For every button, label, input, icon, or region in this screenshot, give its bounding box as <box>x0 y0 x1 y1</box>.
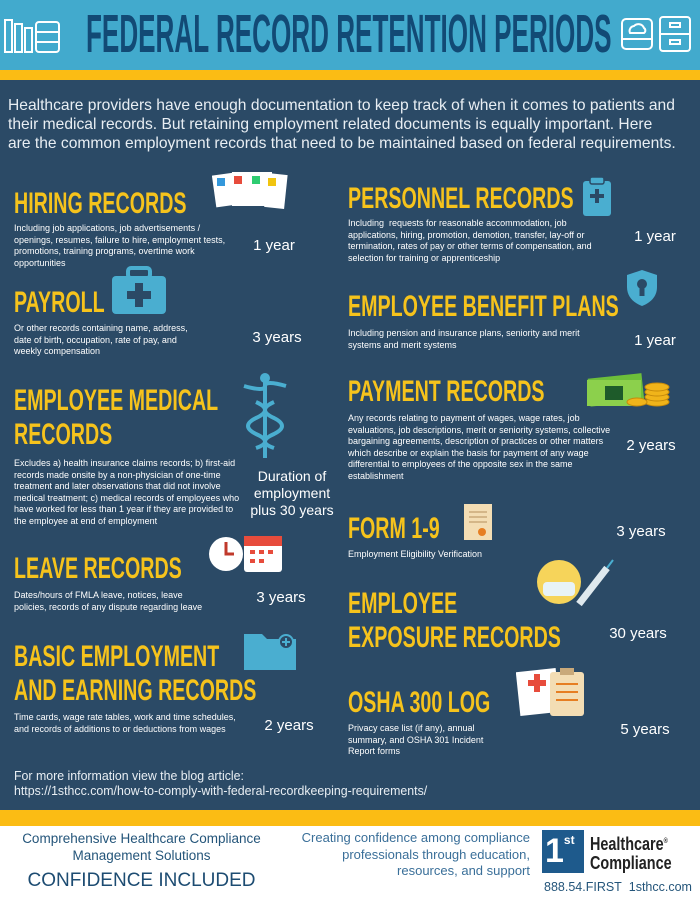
section: payment records: Any records relating to payment of wages, wage rates, job evaluations, job descriptions, merit or seniority systems, collective bargaining agreements, description of practices or other matters which describe or explain the basis for payment of any wage differential to employees of the opposite sex in the same establishment <box>348 413 610 480</box>
section: hiring records: Including job applications, job advertisements / openings, resumes, failure to hire, employment tests, promotions, training programs, overtime work opportunities <box>14 223 225 268</box>
section: osha 300 log: OSHA 300 LOG <box>348 686 490 719</box>
section: employee medical records: RECORDS <box>14 418 112 451</box>
icon: clipboard <box>583 178 611 216</box>
section: payment records: PAYMENT RECORDS <box>348 375 545 408</box>
icon: mask and syringe <box>537 560 614 606</box>
section: hiring records: 1 year <box>253 237 295 254</box>
section: payroll: Or other records containing name, address, date of birth, occupation, rate of pay, and weekly compensation <box>14 323 188 356</box>
footer left <box>22 831 261 891</box>
section: osha 300 log: 5 years <box>620 721 670 738</box>
section: leave records: 3 years <box>256 589 306 606</box>
section: leave records: Dates/hours of FMLA leave, notices, leave policies, records of any dispute regarding leave <box>14 590 202 612</box>
section: basic employment and earning records: BASIC EMPLOYMENT <box>14 640 219 673</box>
section: payment records: 2 years <box>626 437 676 454</box>
blog link: https://1sthcc.com/how-to-comply-with-federal-recordkeeping-requirements/ <box>14 783 427 798</box>
section: employee exposure records: EXPOSURE RECORDS <box>348 621 561 654</box>
section: employee benefit plans: Including pension and insurance plans, seniority and merit systems and merit systems <box>348 328 580 350</box>
section: hiring records <box>14 187 295 268</box>
section: personnel records <box>348 182 676 263</box>
bottom yellow stripe <box>0 810 700 826</box>
section: employee medical records: EMPLOYEE MEDICAL <box>14 384 218 417</box>
intro text: Healthcare providers have enough documentation to keep track of when it comes to patients and <box>8 97 675 114</box>
section: osha 300 log <box>348 686 670 756</box>
section: employee exposure records <box>348 587 667 654</box>
icon: money and coins <box>587 373 670 407</box>
intro text <box>8 97 676 152</box>
section: payment records <box>348 375 676 480</box>
logo: 888.54.FIRST 1sthcc.com <box>544 880 692 894</box>
section: payroll: 3 years <box>252 329 302 346</box>
icon: medical report <box>516 668 584 716</box>
icon: shield <box>627 270 657 306</box>
intro text: their medical records. But retaining employment related documents is equally important. Here <box>8 116 652 133</box>
section: employee exposure records: 30 years <box>609 625 667 642</box>
section: basic employment and earning records: Time cards, wage rate tables, work and time schedules, and records of additions to or deductions from wages <box>14 712 236 734</box>
section: employee benefit plans <box>348 290 676 350</box>
logo: Healthcare® <box>590 834 668 854</box>
section: form i-9 <box>348 512 666 559</box>
section: basic employment and earning records <box>14 640 314 734</box>
icon: folder <box>244 634 296 670</box>
blog link: For more information view the blog article: <box>14 768 244 783</box>
section: payroll <box>14 286 302 356</box>
footer left: CONFIDENCE INCLUDED <box>27 870 256 891</box>
section: employee medical records: Excludes a) health insurance claims records; b) first-aid records made onsite by a non-physician of one-time treatment and later observations that did not involve medical treatment; c) medical records of employees who have worked for less than 1 year if they are provided to the employee at end of employment <box>14 458 239 526</box>
logo: 1st <box>545 832 575 870</box>
footer tagline: Creating confidence among compliance professionals through education, resources, and support <box>302 830 530 878</box>
icon: binders <box>4 19 60 53</box>
icon: certificate <box>464 504 492 540</box>
icon: clock and calendar <box>209 536 282 572</box>
section: payroll: PAYROLL <box>14 286 105 319</box>
section: basic employment and earning records: AND EARNING RECORDS <box>14 674 256 707</box>
section: form i-9: Employment Eligibility Verification <box>348 549 482 559</box>
section: personnel records: 1 year <box>634 228 676 245</box>
section: form i-9: 3 years <box>616 523 666 540</box>
logo: Compliance <box>590 853 672 873</box>
footer left: Management Solutions <box>72 848 211 863</box>
icon: medical bag <box>112 266 166 314</box>
section: leave records: LEAVE RECORDS <box>14 552 182 585</box>
header band <box>0 0 700 70</box>
intro text: are the common employment records that need to be maintained based on federal requirements. <box>8 135 676 152</box>
logo <box>542 830 692 894</box>
icon: caduceus <box>244 373 286 458</box>
section: basic employment and earning records: 2 years <box>264 717 314 734</box>
section: form i-9: FORM 1-9 <box>348 512 440 545</box>
section: employee exposure records: EMPLOYEE <box>348 587 457 620</box>
section: employee medical records <box>14 384 334 526</box>
section: employee medical records: Duration of employment plus 30 years <box>250 468 334 518</box>
section: employee benefit plans: EMPLOYEE BENEFIT PLANS <box>348 290 619 323</box>
section: leave records <box>14 552 306 612</box>
blog link <box>14 768 428 798</box>
section: osha 300 log: Privacy case list (if any), annual summary, and OSHA 301 Incident Report forms <box>348 723 483 756</box>
icon: resumes <box>212 172 288 209</box>
footer left: Comprehensive Healthcare Compliance <box>22 831 261 846</box>
title: FEDERAL RECORD RETENTION PERIODS <box>86 4 612 64</box>
top yellow stripe <box>0 70 700 80</box>
section: personnel records: Including requests for reasonable accommodation, job applications, hiring, promotion, demotion, transfer, lay-off or termination, rates of pay or other terms of compensation, and selection for training or apprenticeship <box>348 218 592 262</box>
section: personnel records: PERSONNEL RECORDS <box>348 182 574 215</box>
section: employee benefit plans: 1 year <box>634 332 676 349</box>
icon: drive and cabinet <box>621 16 691 52</box>
section: hiring records: HIRING RECORDS <box>14 187 187 220</box>
